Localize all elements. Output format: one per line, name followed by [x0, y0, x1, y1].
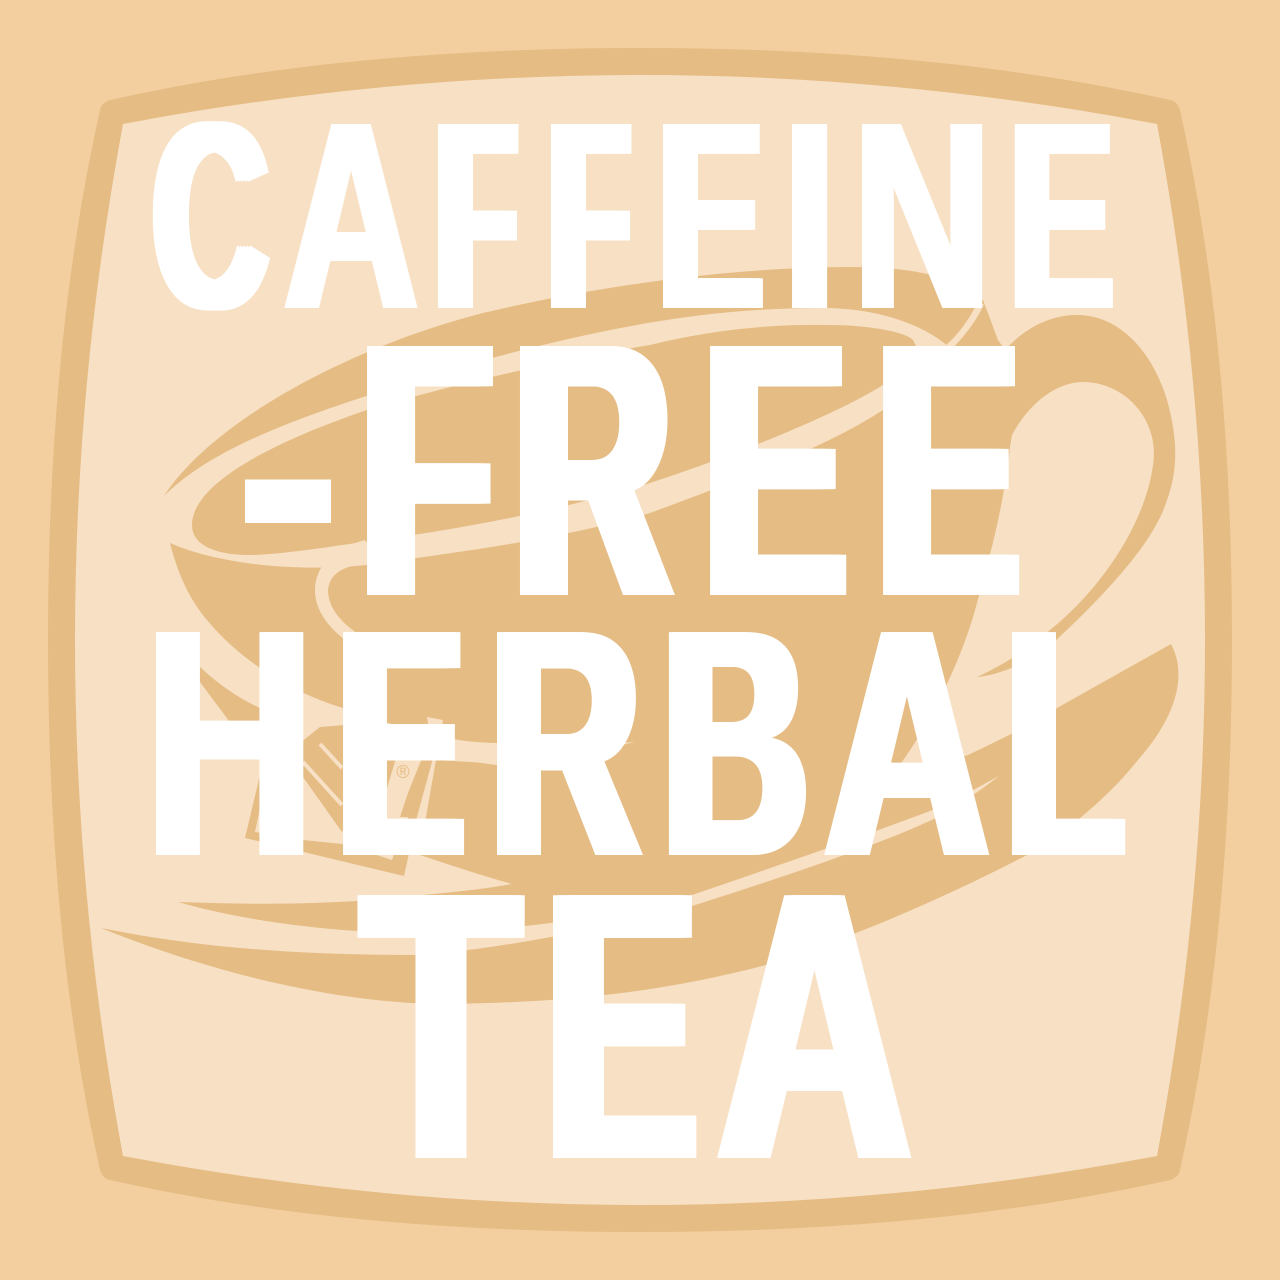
title line: CAFFEINE: N — [853, 66, 991, 365]
badge inner panel — [75, 75, 1205, 1205]
registered mark: ® — [396, 762, 410, 782]
tag body — [245, 725, 433, 876]
title line: CAFFEINE: A — [284, 66, 419, 365]
title line: CAFFEINE: F — [438, 66, 515, 365]
tag inner panel — [255, 758, 425, 860]
cup curl highlight — [315, 540, 372, 658]
title line: HERBAL: E — [339, 562, 463, 924]
title line: CAFFEINE: I — [787, 66, 832, 365]
title line: -FREE: - — [232, 267, 345, 672]
tea surface — [192, 325, 925, 555]
saucer and cup base — [101, 644, 1178, 1004]
title line: HERBAL: R — [490, 562, 640, 924]
title line: CAFFEINE — [152, 66, 1113, 365]
title line: TEA — [357, 812, 912, 1239]
title line: TEA: T — [361, 812, 521, 1239]
title line: HERBAL: A — [825, 562, 989, 924]
title line: HERBAL: L — [1008, 562, 1122, 924]
icon: tea cup and saucer — [101, 267, 1178, 1004]
title line: HERBAL — [146, 562, 1126, 924]
title line: TEA: A — [718, 812, 911, 1239]
title line: CAFFEINE: E — [1011, 66, 1113, 365]
title line: CAFFEINE: C — [153, 66, 268, 365]
title line: HERBAL: H — [146, 562, 314, 924]
title line: -FREE: E — [878, 267, 1019, 672]
cup lower highlight band — [190, 620, 635, 765]
icon: tea bag tag — [245, 717, 443, 876]
title line: -FREE: F — [361, 267, 492, 672]
title line: CAFFEINE: F — [551, 66, 628, 365]
title line: -FREE: E — [705, 267, 846, 672]
title line: HERBAL: B — [663, 562, 808, 924]
title line: CAFFEINE: E — [659, 66, 763, 365]
tag dark slivers — [387, 758, 433, 817]
title line: -FREE: R — [514, 267, 671, 672]
title line: -FREE — [232, 267, 1020, 672]
rim streak highlight — [946, 304, 984, 349]
cup body and handle — [160, 267, 1175, 800]
light gap beside tag — [408, 717, 443, 860]
tag stripes — [303, 744, 342, 805]
dark wedge beside tag — [197, 664, 290, 760]
title line: TEA: E — [548, 812, 695, 1239]
rim highlight band — [150, 308, 950, 568]
